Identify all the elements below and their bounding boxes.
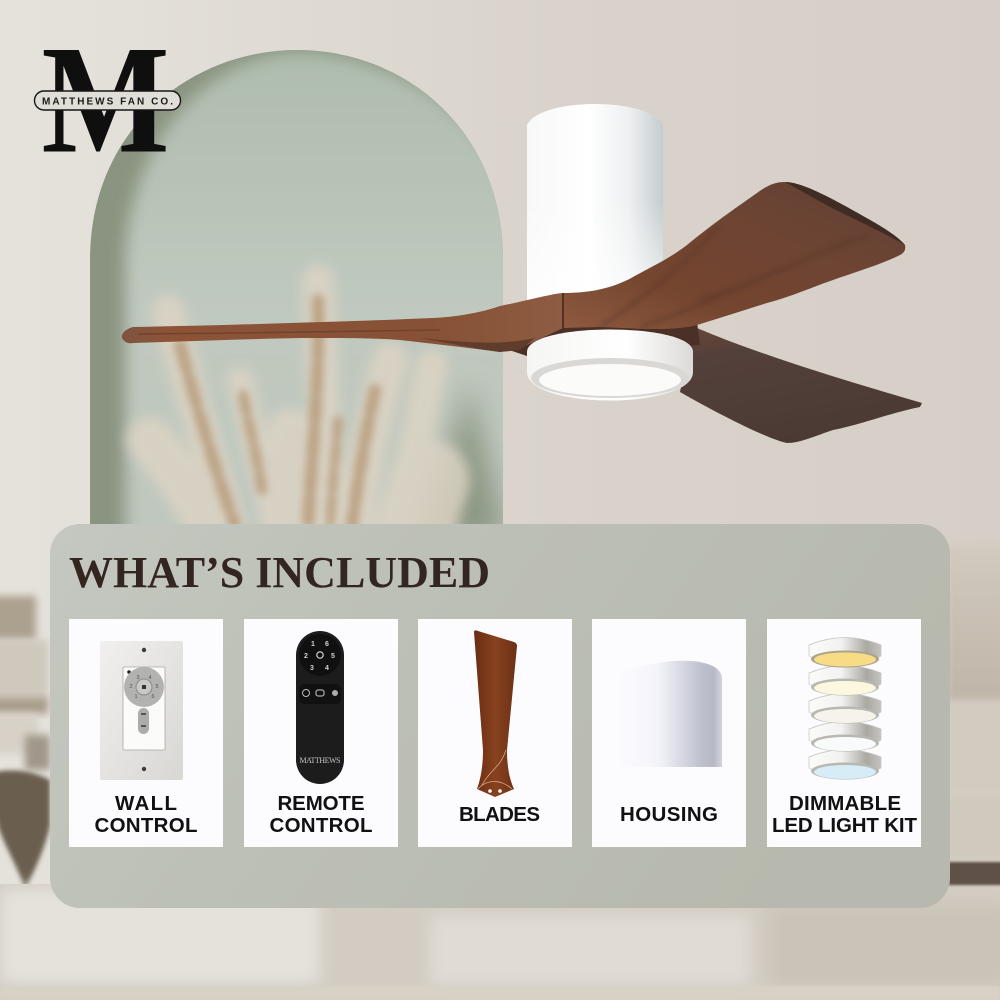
logo name pill: MATTHEWS FAN CO.	[42, 96, 173, 108]
icon: remote	[296, 631, 344, 784]
ceiling fan	[122, 104, 922, 443]
icon: wall control plate: 1	[134, 694, 138, 700]
card: wall control	[69, 619, 223, 847]
label: BLADES	[459, 803, 540, 826]
label: REMOTE	[278, 792, 364, 815]
label: CONTROL	[94, 814, 198, 837]
left blade	[122, 293, 563, 352]
lower right blade	[680, 328, 922, 443]
icon: remote: 4	[325, 665, 329, 672]
icon: remote: MATTHEWS	[300, 756, 340, 765]
icon: housing	[617, 661, 722, 767]
upper right blade	[563, 182, 905, 329]
label	[94, 792, 198, 837]
icon: remote: 5	[331, 653, 335, 660]
label: DIMMABLE	[789, 792, 901, 815]
label: WALL	[115, 792, 177, 815]
background: right sofa	[948, 545, 1000, 860]
card: remote control	[244, 619, 398, 847]
background: floor	[0, 862, 1000, 1000]
heading: WHAT’S INCLUDED	[69, 548, 490, 597]
shadow under hub	[500, 322, 700, 356]
logo name pill	[34, 91, 180, 110]
background: arched wall niche	[90, 50, 503, 524]
soft plume mass	[150, 280, 432, 530]
label: HOUSING	[620, 803, 718, 826]
icon: wall control plate: 2	[129, 684, 133, 690]
label: LED LIGHT KIT	[772, 814, 917, 837]
label	[772, 792, 917, 837]
icon: remote: 1	[311, 641, 315, 648]
panel: what's included	[50, 524, 950, 908]
plant leaf	[0, 770, 50, 890]
label: CONTROL	[270, 814, 372, 837]
logo monogram M: M	[42, 14, 170, 186]
card: housing	[592, 619, 746, 847]
icon: wall control plate: 4	[148, 675, 152, 681]
icon: remote: 3	[310, 665, 314, 672]
fan housing	[527, 104, 663, 320]
icon: wall control plate: 3	[136, 675, 140, 681]
icon: remote: 6	[325, 641, 329, 648]
logo: Matthews Fan Co.	[34, 14, 180, 186]
icon: wall control plate: 5	[155, 684, 159, 690]
label	[270, 792, 372, 837]
icon: remote: 2	[304, 653, 308, 660]
LED light ring	[527, 330, 693, 400]
icon: wall control plate	[100, 641, 183, 780]
background: pampas grass	[150, 280, 432, 530]
card: blades	[418, 619, 572, 847]
icon: wall control plate: 6	[151, 694, 155, 700]
icon: blade	[474, 630, 517, 797]
card: dimmable LED light kit	[767, 619, 921, 847]
background: left sofa	[0, 596, 50, 890]
core stems	[180, 300, 375, 525]
icon: LED discs	[809, 638, 881, 780]
